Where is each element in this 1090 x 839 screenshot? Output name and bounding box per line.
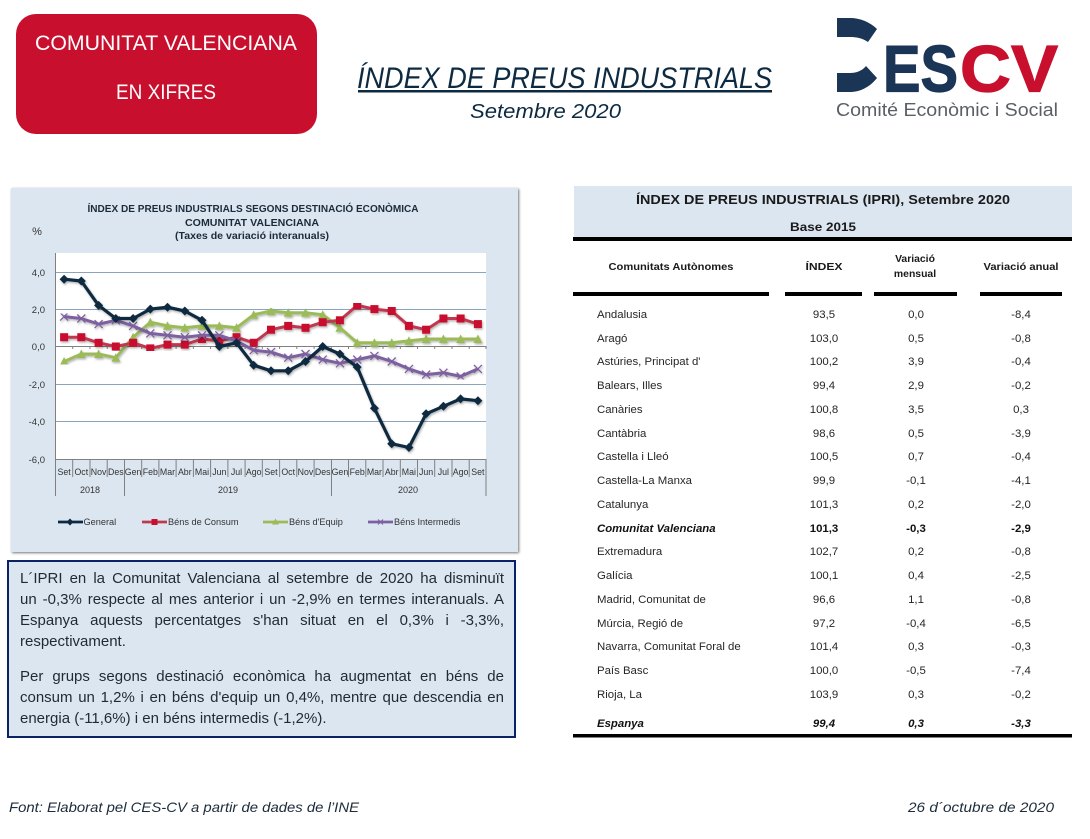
- table header band: ÍNDEX DE PREUS INDUSTRIALS (IPRI), Setembre 2020: [636, 192, 1010, 207]
- title: [357, 62, 772, 123]
- table rows: -2,5: [1011, 570, 1031, 582]
- table rows: Navarra, Comunitat Foral de: [597, 641, 741, 653]
- table rows: -0,3: [1011, 641, 1031, 653]
- table rows: -4,1: [1011, 475, 1031, 487]
- table rows: 0,7: [908, 451, 924, 463]
- table rows: Castella-La Manxa: [597, 475, 693, 487]
- table column headers: [608, 254, 1059, 280]
- x axis labels: Des: [108, 467, 124, 477]
- table rows: Comunitat Valenciana: [597, 523, 716, 535]
- source note: Font: Elaborat pel CES-CV a partir de dades de l’INE: [9, 799, 360, 815]
- table rows: -0,8: [1011, 594, 1031, 606]
- chart title: (Taxes de variació interanuals): [175, 231, 329, 242]
- x axis labels: Ago: [246, 467, 262, 477]
- table rows: 0,2: [908, 546, 924, 558]
- table rows: 100,5: [810, 451, 838, 463]
- y axis labels: [29, 268, 45, 466]
- table rows: -0,2: [1011, 689, 1031, 701]
- table rows: Múrcia, Regió de: [597, 618, 683, 630]
- table header band: Base 2015: [790, 220, 856, 234]
- table rows: 101,3: [810, 499, 838, 511]
- line: Béns d'Equip: [64, 311, 478, 362]
- table column headers: mensual: [894, 269, 936, 280]
- x axis labels: Set: [264, 467, 278, 477]
- x axis labels: Feb: [350, 467, 365, 477]
- x axis labels: Set: [471, 467, 485, 477]
- title: Setembre 2020: [470, 101, 621, 123]
- table rows: -0,3: [906, 523, 926, 535]
- table rows: 0,3: [908, 641, 924, 653]
- table rows: 0,3: [1013, 404, 1029, 416]
- line: Béns de Consum: [64, 305, 478, 348]
- table rows: 99,9: [813, 475, 835, 487]
- badge: Comunitat Valenciana en xifres: [16, 14, 317, 134]
- table rows: 0,4: [908, 570, 924, 582]
- table column headers: ÍNDEX: [806, 260, 843, 273]
- table rows: 0,5: [908, 428, 924, 440]
- x axis labels: Set: [57, 467, 71, 477]
- table rows: 0,2: [908, 499, 924, 511]
- x axis labels: Nov: [91, 467, 107, 477]
- x axis labels: Oct: [281, 467, 296, 477]
- x axis labels: Abr: [385, 467, 399, 477]
- chart legend: General: [84, 517, 116, 527]
- line: General: [64, 279, 478, 448]
- logo: CES-CV: Comité Econòmic i Social: [836, 100, 1058, 120]
- x axis labels: Mar: [367, 467, 382, 477]
- table rows: 100,1: [810, 570, 838, 582]
- chart legend: Béns d'Equip: [289, 517, 343, 527]
- table rows: 0,3: [908, 689, 924, 701]
- badge: Comunitat Valenciana en xifres: EN XIFRES: [116, 81, 216, 104]
- table rows: -2,0: [1011, 499, 1031, 511]
- table column headers: Variació anual: [984, 262, 1059, 273]
- text box: summary: energia (-11,6%) i en béns intermedis (-1,2%).: [20, 710, 327, 727]
- table rows: 100,0: [810, 665, 838, 677]
- table rows: 102,7: [810, 546, 838, 558]
- chart legend: [58, 517, 461, 527]
- table rows: Astúries, Principat d': [597, 356, 700, 368]
- text box: summary: Espanya aquests percentatges s'han situat en el 0,3% i -3,3%,: [20, 612, 504, 629]
- chart legend: Béns de Consum: [168, 517, 239, 527]
- table rows: 101,3: [810, 523, 838, 535]
- table rows: -3,3: [1011, 718, 1031, 730]
- table rows: -0,4: [1011, 356, 1031, 368]
- text box: summary: Per grups segons destinació econòmica ha augmentat en béns de: [20, 668, 504, 685]
- table rows: Madrid, Comunitat de: [597, 594, 706, 606]
- table rows: -7,4: [1011, 665, 1031, 677]
- x axis labels: Jul: [438, 467, 449, 477]
- x axis labels: Ago: [453, 467, 469, 477]
- table rows: 3,5: [908, 404, 924, 416]
- x axis labels: Jun: [212, 467, 226, 477]
- x axis labels: Abr: [178, 467, 192, 477]
- x axis labels: Des: [315, 467, 331, 477]
- table rows: 100,2: [810, 356, 838, 368]
- chart plot: [29, 226, 486, 496]
- table rows: 98,6: [813, 428, 835, 440]
- table rows: -0,8: [1011, 333, 1031, 345]
- table rows: Balears, Illes: [597, 380, 663, 392]
- y axis labels: -4,0: [29, 417, 45, 428]
- table rows: Andalusia: [597, 309, 648, 321]
- text box: summary: L´IPRI en la Comunitat Valenciana al setembre de 2020 ha disminuït: [20, 570, 504, 587]
- table rows: 100,8: [810, 404, 838, 416]
- table rows: Cantàbria: [597, 428, 647, 440]
- x axis labels: Oct: [74, 467, 89, 477]
- table rows: 93,5: [813, 309, 835, 321]
- table rows: Extremadura: [597, 546, 663, 558]
- y axis labels: 4,0: [32, 268, 45, 279]
- x axis labels: Jun: [419, 467, 433, 477]
- panel: data table: [573, 186, 1072, 738]
- table rows: -0,5: [906, 665, 926, 677]
- table rows: -2,9: [1011, 523, 1031, 535]
- x axis labels: Mai: [402, 467, 416, 477]
- y axis labels: -6,0: [29, 455, 45, 466]
- table rows: 1,1: [908, 594, 924, 606]
- x axis labels: [57, 467, 485, 477]
- table rows: -6,5: [1011, 618, 1031, 630]
- table column headers: Comunitats Autònomes: [608, 262, 734, 273]
- year labels: 2018: [80, 485, 100, 495]
- year labels: 2019: [218, 485, 238, 495]
- logo: CES-CV: CV: [960, 32, 1058, 106]
- x axis labels: Feb: [143, 467, 158, 477]
- table rows: -0,4: [906, 618, 926, 630]
- table rows: Galícia: [597, 570, 633, 582]
- title: ÍNDEX DE PREUS INDUSTRIALS: [357, 62, 772, 95]
- table rows: 103,9: [810, 689, 838, 701]
- table rows: [597, 309, 1031, 730]
- y axis unit: %: [32, 226, 42, 238]
- badge: Comunitat Valenciana en xifres: COMUNITAT VALENCIANA: [35, 32, 297, 55]
- text box: summary: un -0,3% respecte al mes anterior i un -2,9% en termes interanuals. A: [20, 591, 504, 608]
- table rows: 99,4: [813, 380, 835, 392]
- table rows: Aragó: [597, 333, 627, 345]
- table rows: 96,6: [813, 594, 835, 606]
- table rows: Castella i Lleó: [597, 451, 669, 463]
- table rows: -0,4: [1011, 451, 1031, 463]
- table rows: 0,3: [908, 718, 925, 730]
- x axis labels: Gen: [125, 467, 142, 477]
- x axis labels: Gen: [332, 467, 348, 477]
- table rows: 0,0: [908, 309, 924, 321]
- table rows: 99,4: [813, 718, 836, 730]
- x axis labels: Nov: [298, 467, 314, 477]
- text box: summary: respectivament.: [20, 633, 126, 650]
- chart title: [88, 202, 419, 242]
- logo: CES-CV: [836, 18, 1058, 120]
- table column headers: Variació: [895, 254, 935, 265]
- x axis labels: Mar: [160, 467, 175, 477]
- x axis labels: Jul: [231, 467, 242, 477]
- table rows: 103,0: [810, 333, 838, 345]
- text box: summary: [7, 560, 516, 738]
- table rows: 97,2: [813, 618, 835, 630]
- table header band: [574, 186, 1072, 238]
- table rows: País Basc: [597, 665, 649, 677]
- year labels: [80, 485, 418, 495]
- table rows: -0,8: [1011, 546, 1031, 558]
- table rows: -3,9: [1011, 428, 1031, 440]
- year labels: 2020: [398, 485, 418, 495]
- y axis labels: 0,0: [32, 342, 45, 353]
- table rows: -0,2: [1011, 380, 1031, 392]
- date: 26 d´octubre de 2020: [907, 799, 1054, 815]
- table rows: Rioja, La: [597, 689, 643, 701]
- chart legend: Béns Intermedis: [394, 517, 461, 527]
- table rows: Canàries: [597, 404, 643, 416]
- chart title: COMUNITAT VALENCIANA: [185, 218, 319, 229]
- table rows: 3,9: [908, 356, 924, 368]
- line: Béns Intermedis: [64, 317, 478, 376]
- x axis labels: Mai: [195, 467, 209, 477]
- y axis labels: 2,0: [32, 305, 45, 316]
- logo: CES-CV: ES: [883, 32, 958, 106]
- table rows: Espanya: [597, 718, 644, 730]
- table rows: -0,1: [906, 475, 926, 487]
- table rows: Catalunya: [597, 499, 649, 511]
- table rows: -8,4: [1011, 309, 1031, 321]
- panel: chart: [11, 188, 518, 552]
- table rows: 0,5: [908, 333, 924, 345]
- text box: summary: consum un 1,2% i en béns d'equip un 0,4%, mentre que descendia en: [20, 689, 504, 706]
- y axis labels: -2,0: [29, 380, 45, 391]
- table rows: 2,9: [908, 380, 924, 392]
- chart title: ÍNDEX DE PREUS INDUSTRIALS SEGONS DESTINACIÓ ECONÒMICA: [88, 202, 419, 215]
- table rows: 101,4: [810, 641, 838, 653]
